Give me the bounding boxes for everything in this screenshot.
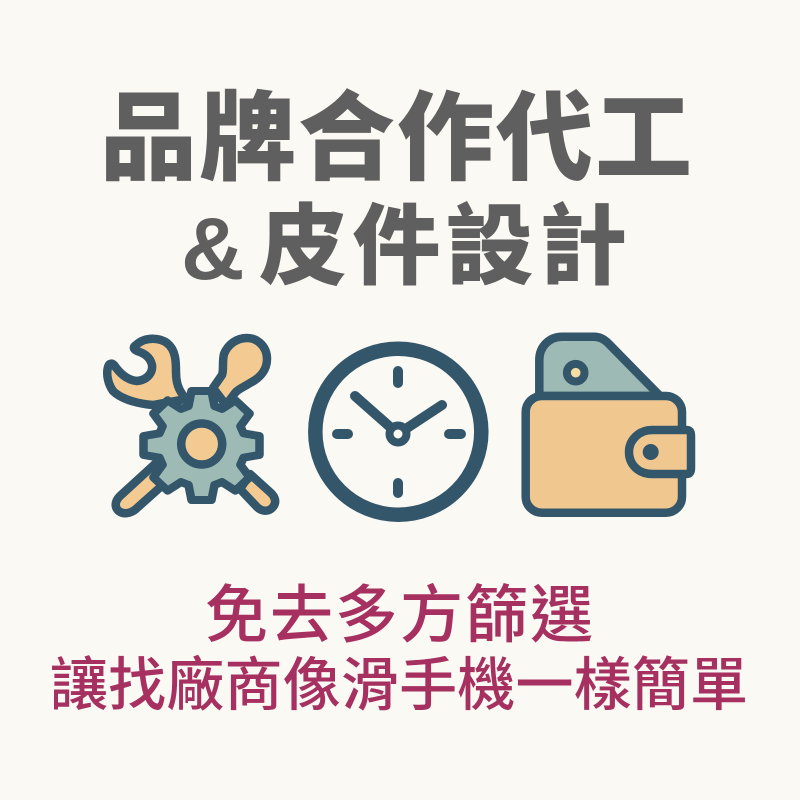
title line 2 [181, 197, 627, 298]
title line 1: 品牌合作代工 [100, 84, 692, 193]
clock ticks [337, 371, 461, 493]
gear [144, 391, 260, 500]
card hole [567, 364, 584, 382]
clock centre [390, 426, 406, 442]
wallet clasp [629, 430, 691, 474]
wrench handle [116, 464, 165, 513]
clock face [315, 349, 481, 515]
subtitle line 2: 讓找廠商像滑手機一樣簡單 [50, 653, 748, 718]
clock hands [355, 396, 442, 434]
icon: wallet [526, 337, 691, 513]
wrench [107, 339, 186, 405]
title line 2 words: 皮件設計 [259, 197, 627, 296]
clasp button [643, 444, 659, 460]
screwdriver head [213, 338, 267, 405]
screwdriver handle [240, 474, 275, 511]
wallet body [526, 396, 682, 513]
card [539, 337, 660, 396]
gear hub [181, 424, 222, 464]
icon: tools and gear [107, 338, 275, 513]
ampersand: & [181, 199, 245, 298]
subtitle line 1: 免去多方篩選 [205, 581, 593, 651]
icon: clock [315, 349, 481, 515]
